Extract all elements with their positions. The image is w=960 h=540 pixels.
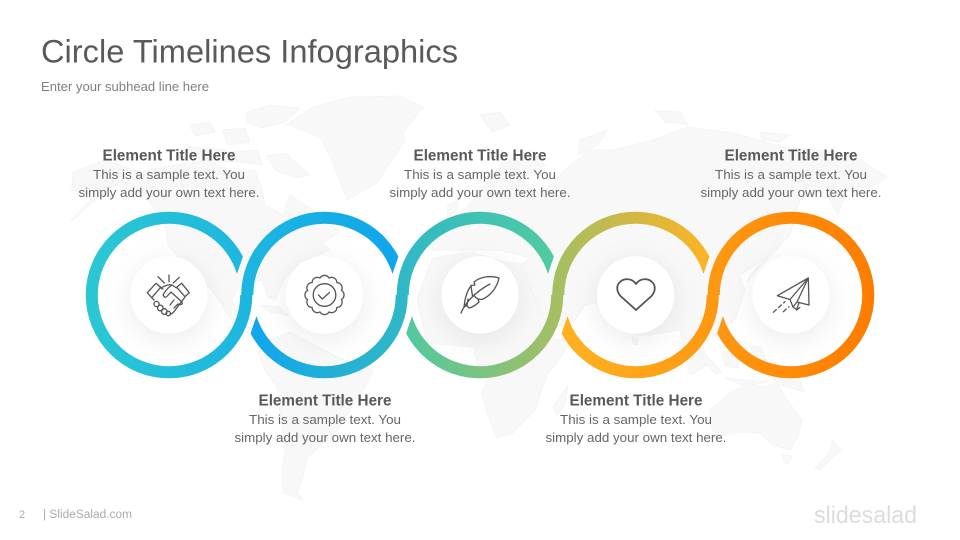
icon: heart: [617, 279, 655, 310]
icon: verified badge: [301, 272, 348, 318]
ring segment: green to yellow: [406, 212, 709, 378]
element 1 text: [78, 148, 260, 200]
element 1 text: This is a sample text. You: [93, 168, 245, 182]
element 3 text: Element Title Here: [414, 148, 547, 164]
footer logo: slidesalad: [814, 502, 917, 529]
element 2 text: [234, 392, 416, 445]
element 4 text: [546, 392, 726, 445]
element 3 text: [390, 148, 570, 200]
element 5 text: This is a sample text. You: [715, 168, 867, 182]
element 3 text: simply add your own text here.: [390, 186, 570, 200]
element 5 text: simply add your own text here.: [700, 186, 882, 200]
element 3 text: This is a sample text. You: [404, 168, 556, 182]
element 2 text: Element Title Here: [258, 392, 392, 410]
ring segment: yellow to orange: [562, 212, 874, 378]
element 2 text: simply add your own text here.: [234, 431, 416, 445]
center disc shadows: [129, 261, 831, 341]
element 4 text: This is a sample text. You: [560, 413, 712, 427]
element 5 text: Element Title Here: [724, 148, 858, 164]
element 5 text: [700, 148, 882, 200]
element 4 text: Element Title Here: [570, 392, 703, 410]
element 1 text: simply add your own text here.: [78, 186, 260, 200]
ring chain: [86, 212, 874, 378]
world map background: [70, 96, 887, 500]
icon: paper plane: [773, 278, 809, 312]
title: Circle Timelines Infographics: [41, 34, 458, 70]
page number: 2: [19, 509, 25, 521]
ring segment: teal to blue: [86, 212, 398, 378]
element 1 text: Element Title Here: [102, 148, 236, 164]
element 4 text: simply add your own text here.: [546, 431, 726, 445]
subhead: Enter your subhead line here: [41, 80, 209, 94]
ring segment: blue to green: [251, 212, 554, 378]
center discs: [130, 256, 830, 334]
icon: handshake: [147, 275, 189, 316]
footer site: | SlideSalad.com: [43, 509, 132, 521]
element 2 text: This is a sample text. You: [249, 413, 401, 427]
icon: feather: [461, 277, 499, 313]
